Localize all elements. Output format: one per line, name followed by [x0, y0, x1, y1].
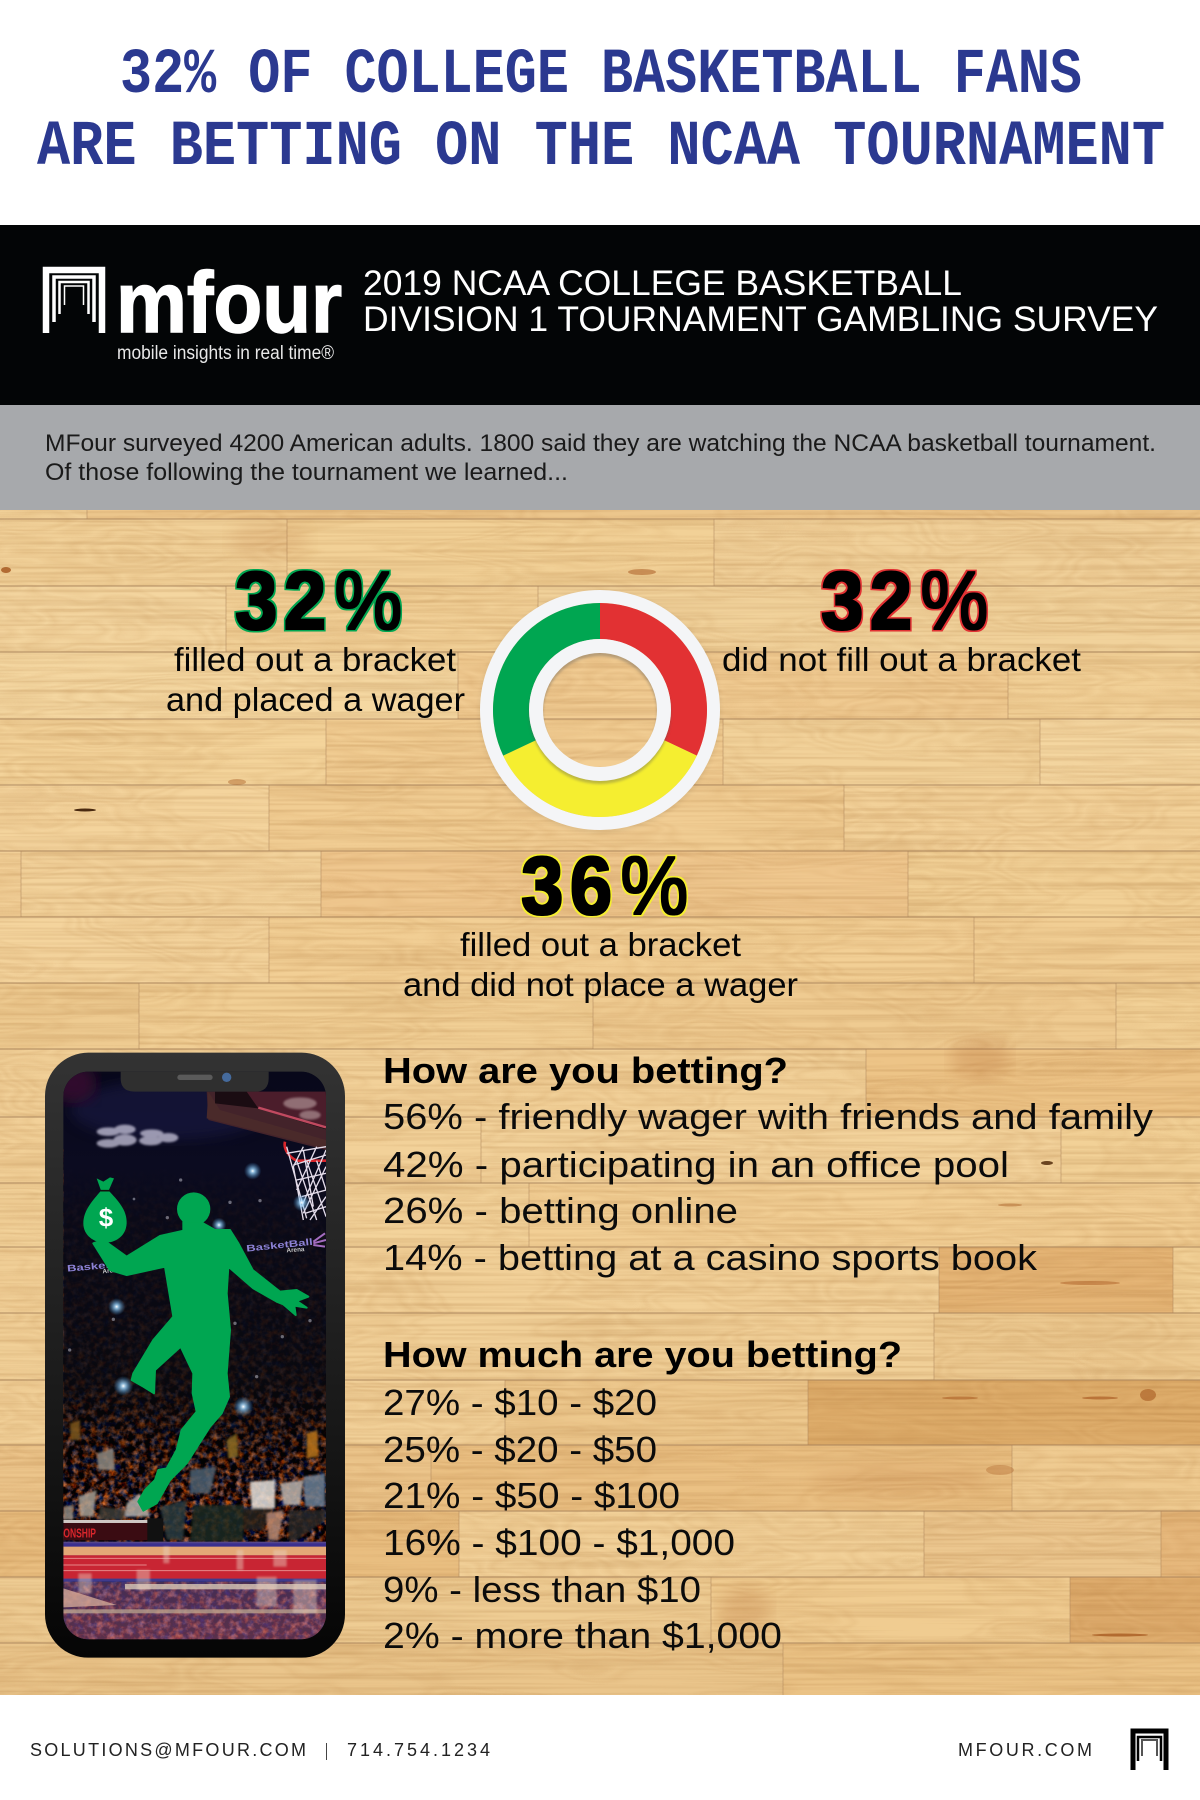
betting methods list: 42% - participating in an office pool — [383, 1144, 1009, 1185]
stat: 32% did not fill out a bracket: did not fill out a bracket — [722, 641, 1081, 678]
intro panel: Of those following the tournament we learned... — [45, 459, 568, 486]
header band — [0, 225, 1200, 405]
betting amounts list: 9% - less than $10 — [383, 1569, 701, 1610]
arena photo on screen — [50, 1063, 326, 1639]
stat: 36% filled out a bracket and did not place a wager — [403, 839, 798, 1003]
betting amounts list: How much are you betting? — [383, 1334, 902, 1375]
crowd lights — [68, 1162, 312, 1417]
betting methods list — [383, 1050, 1153, 1278]
phone illustration — [45, 1053, 345, 1658]
betting amounts list: 16% - $100 - $1,000 — [383, 1522, 735, 1563]
stat: 36% filled out a bracket and did not place a wager: 36% — [521, 839, 688, 932]
betting amounts list: 2% - more than $1,000 — [383, 1615, 782, 1656]
courtside sign: ONSHIP — [63, 1526, 96, 1540]
footer contact — [30, 1740, 490, 1760]
intro panel: MFour surveyed 4200 American adults. 1800 said they are watching the NCAA basketball tournament. — [45, 430, 1156, 457]
stadium lights — [97, 1125, 178, 1148]
betting amounts list: 25% - $20 - $50 — [383, 1429, 657, 1470]
betting amounts list — [383, 1334, 902, 1656]
backboard — [207, 1092, 326, 1150]
arena banners: Arena — [286, 1246, 305, 1254]
arena banners: Arena — [102, 1267, 121, 1275]
header survey title: 2019 NCAA COLLEGE BASKETBALL — [363, 264, 962, 303]
phone notch — [121, 1072, 269, 1092]
arena banners — [67, 1233, 326, 1275]
title — [37, 40, 1165, 184]
icon: mfour arch — [1133, 1731, 1166, 1770]
phone body — [45, 1053, 345, 1658]
footer website: MFOUR.COM — [958, 1740, 1092, 1760]
betting methods list: 26% - betting online — [383, 1190, 738, 1231]
footer — [0, 1695, 1200, 1800]
betting methods list: 56% - friendly wager with friends and family — [383, 1096, 1153, 1137]
wood floor background — [0, 510, 1200, 1695]
icon: money bag: $ — [99, 1203, 114, 1233]
logo: mfour: mobile insights in real time® — [117, 343, 334, 364]
front row spectators — [63, 1420, 326, 1542]
header survey title — [363, 264, 1158, 339]
betting amounts list: 27% - $10 - $20 — [383, 1382, 657, 1423]
arena banners: BasketBall — [246, 1237, 313, 1254]
basketball hoop net — [285, 1142, 326, 1220]
logo: mfour: mfour — [116, 255, 342, 351]
betting methods list: How are you betting? — [383, 1050, 788, 1091]
intro panel — [0, 405, 1200, 510]
footer contact: SOLUTIONS@MFOUR.COM — [30, 1740, 306, 1760]
stat: 32% filled out a bracket and placed a wager: filled out a bracket — [174, 641, 456, 678]
betting amounts list: 21% - $50 - $100 — [383, 1475, 680, 1516]
header survey title: DIVISION 1 TOURNAMENT GAMBLING SURVEY — [363, 300, 1158, 339]
footer contact: 714.754.1234 — [347, 1740, 490, 1760]
player silhouette — [93, 1192, 308, 1511]
logo: mfour — [46, 255, 342, 364]
stat: 32% filled out a bracket and placed a wager: and placed a wager — [166, 681, 465, 718]
stat: 32% did not fill out a bracket: 32% — [821, 554, 988, 647]
betting methods list: 14% - betting at a casino sports book — [383, 1237, 1038, 1278]
stat: 36% filled out a bracket and did not place a wager: filled out a bracket — [460, 926, 741, 963]
basketball court floor — [63, 1542, 326, 1639]
courtside sign — [63, 1518, 163, 1542]
donut chart — [486, 596, 714, 825]
icon: money bag — [83, 1177, 127, 1243]
stat: 32% did not fill out a bracket — [722, 554, 1081, 678]
stat: 32% filled out a bracket and placed a wager: 32% — [235, 554, 402, 647]
stat: 32% filled out a bracket and placed a wager — [166, 554, 465, 718]
stat: 36% filled out a bracket and did not place a wager: and did not place a wager — [403, 966, 798, 1003]
arena banners: BasketBall — [67, 1258, 134, 1274]
